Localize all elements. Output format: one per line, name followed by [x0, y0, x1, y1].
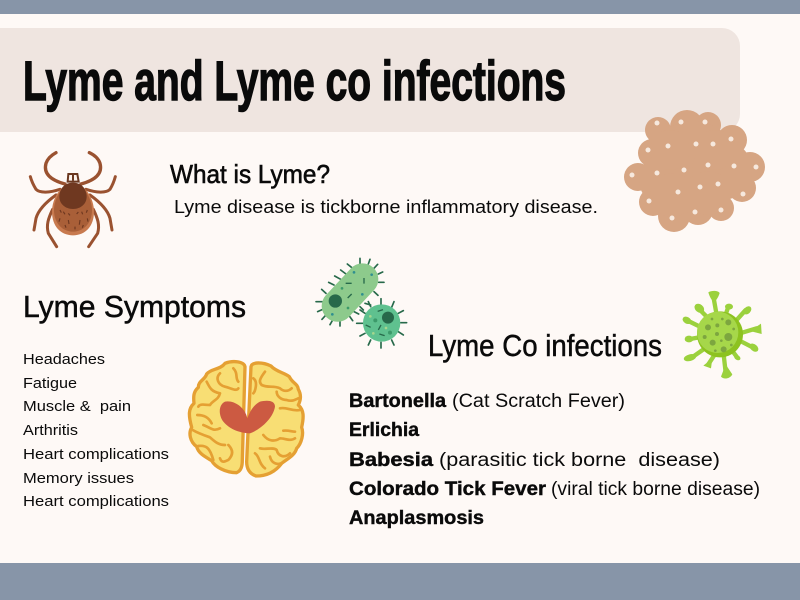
symptoms list: Muscle & pain: [23, 398, 131, 415]
Colorado Tick Fever line: [349, 479, 760, 500]
Babesia line: [349, 450, 720, 471]
Babesia line: (parasitic tick borne disease): [439, 450, 720, 471]
text: Lyme definition: Lyme disease is tickborne inflammatory disease.: [174, 197, 598, 217]
bottom band: [0, 563, 800, 600]
symptoms list: Memory issues: [23, 470, 134, 487]
title panel: [0, 28, 740, 132]
symptoms list: Heart complications: [23, 493, 169, 510]
heading: what is Lyme: What is Lyme?: [170, 159, 330, 189]
icon: bacteria: [315, 257, 407, 348]
Bartonella line: (Cat Scratch Fever): [452, 391, 625, 412]
Anaplasmosis line: Anaplasmosis: [349, 508, 484, 529]
symptoms list: Heart complications: [23, 446, 169, 463]
Colorado Tick Fever line: Colorado Tick Fever: [349, 479, 547, 500]
Bartonella line: Bartonella: [349, 391, 446, 412]
brain centre: [220, 401, 275, 433]
icon: tick: [30, 153, 115, 247]
title: Lyme and Lyme co infections: [23, 49, 566, 112]
symptoms list: Fatigue: [23, 375, 77, 392]
icon: brain: [189, 362, 303, 476]
icon: virus: [681, 291, 762, 378]
co-infections list: [349, 391, 760, 529]
heading: Lyme symptoms: Lyme Symptoms: [23, 289, 246, 324]
heading: Lyme Co infections: Lyme Co infections: [428, 328, 662, 363]
Babesia line: Babesia: [349, 450, 433, 471]
icon: skin rash: [624, 110, 765, 232]
Colorado Tick Fever line: (viral tick borne disease): [551, 479, 760, 500]
top band: [0, 0, 800, 14]
Bartonella line: [349, 391, 625, 412]
symptoms list: Arthritis: [23, 422, 78, 439]
symptoms list: [23, 351, 169, 510]
symptoms list: Headaches: [23, 351, 105, 368]
Erlichia line: Erlichia: [349, 420, 419, 441]
